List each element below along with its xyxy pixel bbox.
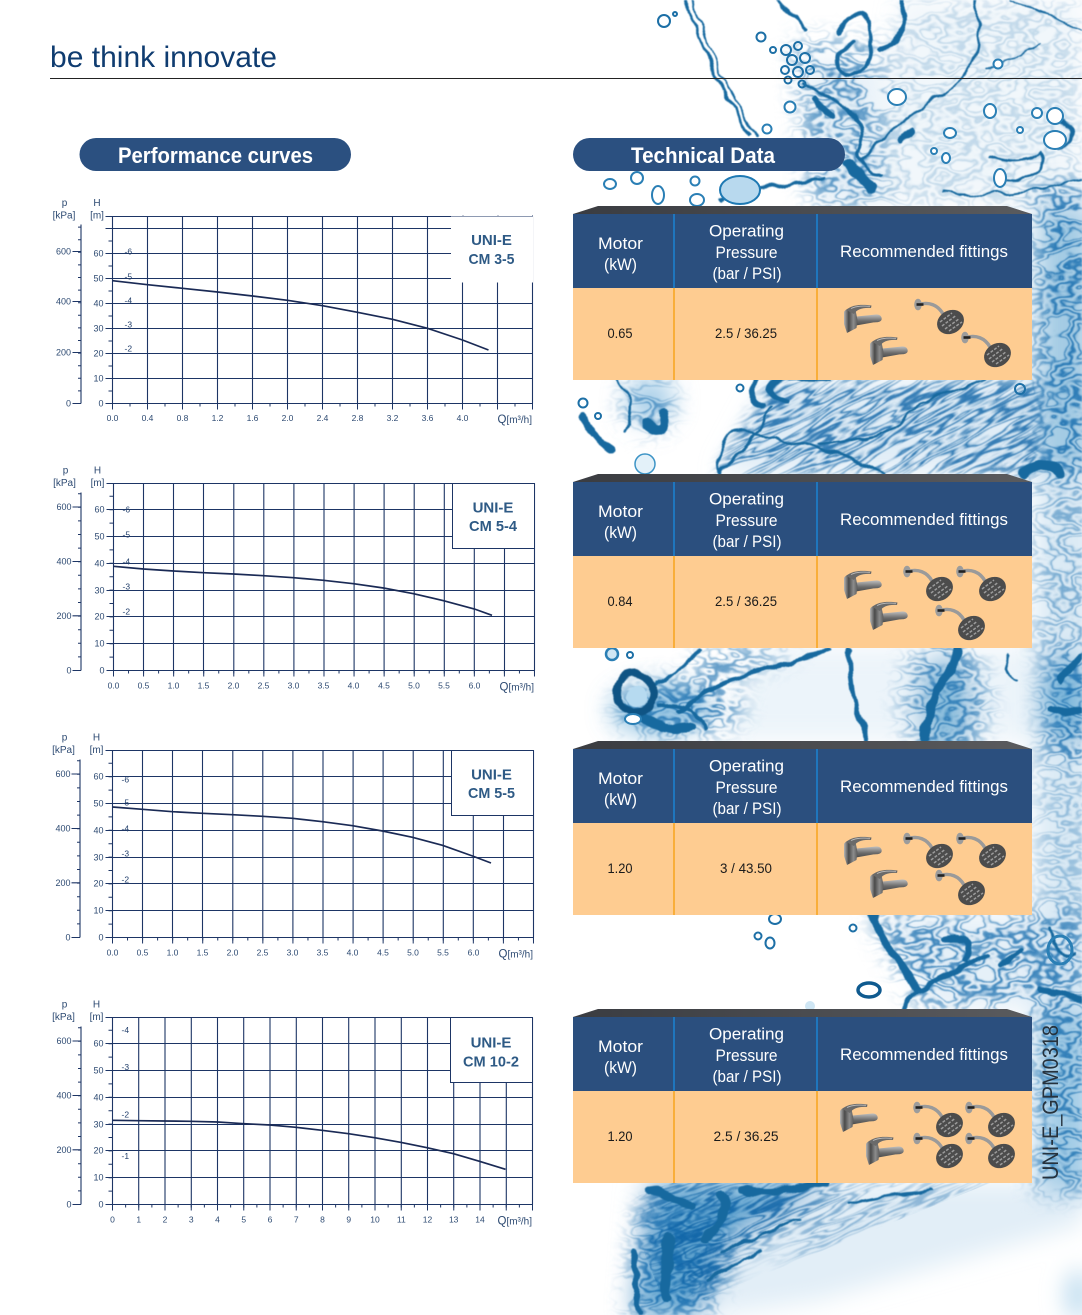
column headers: Motor — [598, 235, 644, 253]
model label: CM 10-2 — [463, 1054, 519, 1070]
axis labels: 400 — [56, 556, 72, 566]
axis labels: 60 — [93, 772, 104, 782]
axis labels: 0.5 — [138, 680, 150, 690]
column headers: Operating — [709, 1026, 784, 1044]
performance curve — [112, 807, 491, 863]
axis labels: Q[m³/h] — [497, 414, 532, 426]
axis labels: 5.5 — [438, 680, 450, 690]
axis labels: 0.4 — [142, 413, 154, 423]
axis labels: [m] — [90, 745, 104, 756]
axis labels: [kPa] — [53, 210, 76, 222]
column headers: Recommended fittings — [840, 243, 1008, 261]
axis labels: 4.0 — [348, 680, 360, 690]
model label — [452, 484, 534, 548]
axis labels: 200 — [56, 611, 72, 621]
axis labels: [m] — [90, 210, 104, 222]
axis labels: 600 — [56, 502, 72, 512]
axis labels: 0 — [99, 666, 104, 676]
axis labels: 8 — [320, 1214, 325, 1224]
axis labels: 3.5 — [318, 680, 330, 690]
axis labels: 3.2 — [387, 413, 399, 423]
axis labels: 0.0 — [108, 680, 120, 690]
column headers: Pressure — [716, 779, 778, 797]
axis labels: 0 — [66, 1200, 72, 1210]
column headers — [598, 490, 1008, 551]
axis labels: 400 — [56, 1090, 72, 1100]
column headers: (bar / PSI) — [712, 800, 782, 818]
axis labels: H — [93, 1000, 100, 1010]
values: 1.20 — [608, 860, 633, 876]
table: technical data CM 5-4 — [573, 474, 1032, 648]
column headers: Pressure — [716, 512, 778, 530]
axis labels: 2.5 — [258, 680, 270, 690]
axis labels: 0 — [66, 398, 71, 408]
values — [608, 860, 772, 876]
axis labels: 3.5 — [317, 948, 329, 958]
axis labels: 50 — [94, 532, 104, 542]
axis labels: 4.5 — [378, 680, 390, 690]
axis labels: -4 — [122, 824, 129, 834]
axis labels: 5.5 — [437, 948, 449, 958]
column headers: Operating — [709, 222, 784, 240]
model label: UNI-E — [473, 500, 513, 516]
axis labels: 30 — [94, 586, 104, 596]
axis labels: 5 — [241, 1214, 246, 1224]
icons: fittings — [840, 1102, 1019, 1173]
values — [608, 1128, 779, 1144]
axis labels: -6 — [122, 504, 130, 514]
performance curve — [112, 281, 488, 350]
document code: UNI-E_GPM0318 — [1038, 1025, 1063, 1180]
column headers: (bar / PSI) — [712, 1068, 782, 1086]
column headers: Motor — [598, 503, 644, 521]
axis labels: -6 — [122, 774, 129, 784]
axis labels: H — [94, 466, 101, 476]
axis labels: 60 — [94, 504, 104, 514]
axis labels: 40 — [93, 826, 104, 836]
axis labels: -2 — [122, 606, 130, 616]
performance curve — [112, 1120, 506, 1169]
axis labels: -1 — [122, 1151, 129, 1161]
axis labels: p — [62, 198, 68, 209]
model label — [450, 1018, 532, 1082]
column headers: (kW) — [604, 1059, 637, 1077]
model label: CM 5-4 — [469, 518, 518, 535]
axis labels: 3 — [189, 1214, 194, 1224]
axis labels: 0.8 — [177, 413, 189, 423]
axis labels: H — [93, 198, 101, 209]
axis labels: 1.2 — [212, 413, 224, 423]
axis labels: 60 — [93, 248, 104, 258]
axis labels: H — [93, 732, 100, 744]
icons: fittings — [844, 833, 1010, 910]
axis labels: Q[m³/h] — [498, 948, 533, 960]
axis labels: 20 — [94, 612, 104, 622]
axis labels: 2.0 — [228, 680, 240, 690]
axis labels: 7 — [294, 1214, 299, 1224]
axis labels: 4.0 — [347, 948, 359, 958]
column headers — [598, 222, 1008, 283]
heading: performance curves: Performance curves — [118, 143, 313, 168]
axis labels: -6 — [124, 246, 132, 256]
axis labels: 13 — [449, 1214, 459, 1224]
axis labels: -5 — [122, 798, 129, 808]
axis labels — [52, 732, 533, 960]
axis labels: 6.0 — [468, 948, 480, 958]
axis labels: 60 — [93, 1038, 104, 1048]
performance curve — [114, 566, 492, 615]
model label — [451, 216, 533, 282]
axis labels: 40 — [94, 558, 104, 568]
model label: UNI-E — [471, 1034, 511, 1052]
axis labels: 0 — [98, 1200, 104, 1210]
axis labels: 10 — [93, 1172, 104, 1182]
axis labels: p — [62, 1000, 68, 1010]
column headers: (kW) — [604, 256, 637, 274]
heading: performance curves — [80, 138, 351, 171]
values — [608, 593, 777, 609]
axis labels: [kPa] — [52, 1012, 75, 1023]
axis labels: 30 — [93, 852, 104, 862]
axis labels: 200 — [55, 878, 70, 888]
values: 2.5 / 36.25 — [715, 325, 777, 341]
axis labels: p — [62, 732, 68, 744]
axis labels: [kPa] — [52, 745, 75, 756]
axis labels: 3.6 — [422, 413, 434, 423]
heading: technical data — [573, 138, 845, 171]
column headers: Pressure — [716, 1047, 778, 1065]
column headers — [598, 758, 1008, 818]
axis labels: -2 — [122, 874, 129, 884]
column headers: Motor — [598, 770, 644, 788]
axis labels: -5 — [122, 530, 130, 540]
axis labels: 200 — [56, 348, 71, 358]
axis labels: Q[m³/h] — [497, 1216, 532, 1228]
axis labels: 0.0 — [107, 413, 119, 423]
axis labels: Q[m³/h] — [499, 682, 534, 694]
axis labels: -4 — [124, 296, 132, 306]
axis labels: 10 — [94, 638, 104, 648]
axis labels: 2.0 — [227, 948, 239, 958]
axis labels: 600 — [55, 769, 70, 779]
model label: CM 3-5 — [468, 251, 514, 268]
axis labels: 4.5 — [377, 948, 389, 958]
values — [608, 325, 777, 341]
axis labels: 14 — [475, 1214, 485, 1224]
axis labels: -2 — [124, 344, 132, 354]
axis labels: -4 — [122, 556, 130, 566]
axis labels: -3 — [124, 320, 132, 330]
axis labels: 2 — [163, 1214, 168, 1224]
axis labels: [m] — [90, 1012, 104, 1023]
axis labels: 0.5 — [137, 948, 149, 958]
axis labels — [53, 466, 534, 694]
axis labels: 1 — [136, 1214, 141, 1224]
axis labels: 50 — [93, 798, 104, 808]
axis labels: 1.5 — [197, 948, 209, 958]
axis labels: 10 — [370, 1214, 380, 1224]
axis labels: -3 — [122, 1062, 129, 1072]
axis labels: 50 — [93, 1066, 104, 1076]
axis labels: 12 — [423, 1214, 432, 1224]
axis labels: -2 — [122, 1110, 129, 1120]
axis labels: 0 — [66, 666, 72, 676]
column headers — [598, 1026, 1008, 1086]
axis labels: 1.0 — [167, 948, 179, 958]
title: be think innovate — [50, 41, 277, 74]
column headers: (bar / PSI) — [712, 265, 782, 283]
axis labels: 1.6 — [247, 413, 259, 423]
axis labels — [53, 198, 532, 426]
column headers: Recommended fittings — [840, 1046, 1008, 1064]
axis labels: 0 — [98, 932, 104, 942]
axis labels: 0 — [65, 932, 70, 942]
values: 2.5 / 36.25 — [715, 593, 777, 609]
model label: CM 5-5 — [468, 785, 515, 802]
axis labels: 0 — [110, 1214, 115, 1224]
column headers: Pressure — [716, 244, 778, 262]
values: 1.20 — [608, 1128, 633, 1144]
axis labels: 400 — [55, 824, 70, 834]
column headers: Operating — [709, 758, 784, 776]
column headers: Recommended fittings — [840, 511, 1008, 529]
axis labels: -3 — [122, 848, 129, 858]
axis labels: 0.0 — [107, 948, 119, 958]
axis labels: 4 — [215, 1214, 220, 1224]
column headers: Operating — [709, 490, 784, 508]
values: 2.5 / 36.25 — [714, 1128, 779, 1144]
chart: UNI-E CM 5-5 — [52, 732, 534, 960]
heading: technical data: Technical Data — [631, 143, 776, 168]
values: 0.84 — [608, 593, 633, 609]
axis labels: -3 — [122, 582, 130, 592]
axis labels: 2.4 — [317, 413, 329, 423]
column headers: (kW) — [604, 524, 637, 542]
axis labels: 6.0 — [469, 680, 481, 690]
axis labels: 10 — [93, 906, 104, 916]
axis labels: 20 — [93, 878, 104, 888]
values: 0.65 — [608, 325, 633, 341]
table: technical data CM 5-5 — [573, 741, 1032, 915]
chart: UNI-E CM 5-4 — [53, 466, 535, 694]
axis labels: 200 — [56, 1145, 72, 1155]
axis labels: 20 — [93, 348, 104, 358]
axis labels: 9 — [346, 1214, 351, 1224]
axis labels: 1.0 — [168, 680, 180, 690]
values: 3 / 43.50 — [720, 860, 772, 876]
axis labels: 600 — [56, 1036, 72, 1046]
chart: UNI-E CM 10-2 — [52, 1000, 534, 1228]
axis labels: 40 — [93, 1092, 104, 1102]
table: technical data CM 10-2 — [573, 1009, 1032, 1183]
water splash background — [560, 0, 1082, 1315]
axis labels: 6 — [268, 1214, 273, 1224]
axis labels: [m] — [91, 478, 105, 489]
axis labels: 600 — [56, 246, 71, 256]
icons: fittings — [844, 299, 1015, 372]
model label: UNI-E — [471, 232, 512, 249]
chart: UNI-E CM 3-5 — [53, 198, 534, 426]
model label — [452, 750, 534, 816]
axis labels: 40 — [93, 298, 104, 308]
axis labels: 4.0 — [457, 413, 469, 423]
axis labels: 1.5 — [198, 680, 210, 690]
axis labels: 400 — [56, 296, 71, 306]
axis labels: 5.0 — [407, 948, 419, 958]
column headers: Motor — [598, 1038, 644, 1056]
axis labels: 3.0 — [287, 948, 299, 958]
column headers: (kW) — [604, 791, 637, 809]
axis labels: 11 — [397, 1214, 406, 1224]
axis labels: 3.0 — [288, 680, 300, 690]
axis labels: 2.5 — [257, 948, 269, 958]
axis labels: 30 — [93, 1120, 104, 1130]
icons: fittings — [844, 566, 1010, 645]
axis labels: -5 — [124, 272, 132, 282]
axis labels: 20 — [93, 1146, 104, 1156]
table: technical data CM 3-5 — [573, 206, 1032, 380]
model label: UNI-E — [471, 766, 512, 784]
axis labels: 50 — [93, 274, 104, 284]
axis labels: 30 — [93, 324, 104, 334]
axis labels: p — [63, 466, 69, 476]
column headers: Recommended fittings — [840, 778, 1008, 796]
axis labels — [52, 1000, 532, 1228]
axis labels: 10 — [93, 374, 104, 384]
axis labels: 2.8 — [352, 413, 364, 423]
axis labels: 0 — [98, 398, 104, 408]
axis labels: [kPa] — [53, 478, 76, 489]
axis labels: -4 — [122, 1025, 129, 1035]
axis labels: 5.0 — [408, 680, 420, 690]
axis labels: 2.0 — [282, 413, 294, 423]
column headers: (bar / PSI) — [712, 533, 782, 551]
